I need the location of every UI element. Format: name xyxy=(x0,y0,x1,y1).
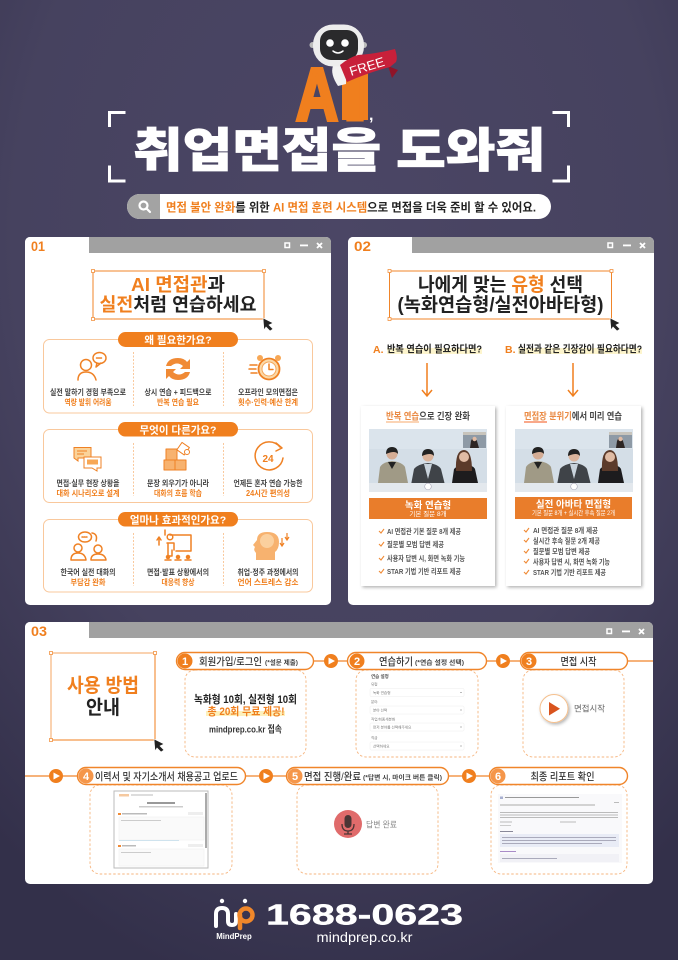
section: why needed: 실전 말하기 경험 부족으로 xyxy=(50,387,127,397)
section: why needed: 반복 연습 필요 xyxy=(157,397,200,407)
option A question xyxy=(373,342,482,356)
step 1: sign up: 총 20회 무료 제공! xyxy=(208,704,284,718)
report screenshot xyxy=(498,794,622,863)
photo: three presenters xyxy=(515,429,633,492)
step 2: practice settings: 연습하기 xyxy=(379,655,413,668)
card A: recording practice: 녹화 연습형 xyxy=(405,500,451,512)
option B question: 실전과 같은 긴장감이 필요하다면? xyxy=(518,342,642,356)
list of features: STAR 기법 기반 리포트 제공 xyxy=(387,567,461,576)
footer: logo xyxy=(216,899,252,941)
step 1: sign up: mindprep.co.kr 접속 xyxy=(209,724,282,736)
upload dialog screenshot xyxy=(114,791,208,868)
card B: real avatar interview: 면접장 분위기에서 미리 연습 xyxy=(524,410,622,422)
step 6: final report xyxy=(490,768,628,874)
step 1: sign up: 회원가입/로그인 xyxy=(199,655,262,668)
settings form screenshot: 분야 선택 xyxy=(373,708,387,712)
list of features: STAR 기법 기반 리포트 제공 xyxy=(533,568,606,577)
section: what is different: 대화 시나리오로 설계 xyxy=(56,488,120,498)
window frame xyxy=(348,237,654,605)
icon: puzzle pieces xyxy=(164,442,190,470)
window frame xyxy=(25,622,653,884)
section: why needed xyxy=(44,332,312,413)
icon: alarm clock xyxy=(249,355,281,380)
card A: recording practice: 반복 연습으로 긴장 완화 xyxy=(386,410,470,422)
arrow: step 4 to 5 xyxy=(259,769,273,783)
title: AI xyxy=(296,53,373,136)
card B: real avatar interview xyxy=(506,406,641,586)
heading box: 안내 xyxy=(86,697,120,719)
step 1: sign up: 녹화형 10회, 실전형 10회 xyxy=(194,692,297,706)
icon: chat bubbles xyxy=(74,448,101,471)
section: what is different: 대화의 흐름 학습 xyxy=(154,488,203,498)
step 6: final report: 6 xyxy=(495,771,501,783)
step 1: sign up: (*설문 제출) xyxy=(265,658,298,666)
section: how effective: 면접·발표 상황에서의 xyxy=(147,567,209,577)
list of features: 질문별 모범 답변 제공 xyxy=(387,540,444,549)
step 2: practice settings: 2 xyxy=(354,656,360,668)
arrow: step 1 to 2 xyxy=(324,654,338,668)
photo: three presenters xyxy=(369,429,487,492)
icon: robot mascot with FREE ribbon xyxy=(310,24,398,86)
icon: robot mascot with FREE ribbon: FREE xyxy=(347,54,387,79)
section: why needed: 왜 필요한가요? xyxy=(144,334,212,346)
step 5: interview in progress: 답변 완료 xyxy=(366,820,397,830)
list of features: 실시간 후속 질문 2개 제공 xyxy=(533,536,600,546)
heading box: AI 면접관과 xyxy=(131,274,225,295)
section: how effective: 대응력 향상 xyxy=(162,577,195,587)
heading box: 사용 방법 xyxy=(67,675,139,697)
window frame: 02 xyxy=(354,239,371,254)
card A: recording practice: 기본 질문 8개 xyxy=(409,509,447,518)
arrow: step 3 to 4 xyxy=(49,769,63,783)
section: what is different xyxy=(44,422,312,502)
title: main heading with corner brackets xyxy=(110,112,568,181)
section: how effective xyxy=(44,512,312,592)
heading box xyxy=(92,270,273,331)
section: why needed: 역량 발휘 어려움 xyxy=(64,397,112,407)
list of features: 질문별 모범 답변 제공 xyxy=(533,547,590,556)
list of features: AI 면접관 기본 질문 8개 제공 xyxy=(387,527,461,536)
option B question xyxy=(505,342,642,356)
section: what is different: 면접·실무 현장 상황을 xyxy=(56,478,120,488)
step 6: final report: 최종 리포트 확인 xyxy=(530,770,594,783)
step 4: upload documents xyxy=(78,768,246,874)
icon: person speaking xyxy=(78,352,106,380)
connector lines xyxy=(25,661,653,776)
section: how effective: 취업·정주 과정에서의 xyxy=(238,567,298,577)
icon: presentation to audience xyxy=(157,530,191,560)
heading box: 나에게 맞는 유형 선택 xyxy=(418,274,583,296)
step 3: start interview xyxy=(520,652,628,757)
settings form screenshot: 녹화 연습형 xyxy=(373,690,391,695)
window frame xyxy=(25,237,331,605)
arrow: step 5 to 6 xyxy=(462,769,476,783)
option A question: A. xyxy=(373,344,384,356)
title: AI: I xyxy=(342,53,368,136)
list of features xyxy=(524,526,610,577)
panel 02: choose type xyxy=(348,237,654,605)
section: what is different: 문장 외우기가 아니라 xyxy=(147,478,210,488)
heading box: (녹화연습형/실전아바타형) xyxy=(398,294,604,316)
section: why needed: 오프라인 모의면접은 xyxy=(238,387,299,397)
settings form screenshot: 직급 xyxy=(371,735,378,740)
window frame: 03 xyxy=(31,624,48,639)
search bar subtitle xyxy=(127,194,551,219)
step 2: practice settings: (*연습 설정 선택) xyxy=(415,658,464,666)
step 3: start interview: 3 xyxy=(526,656,532,668)
step 3: start interview: 면접시작 xyxy=(574,704,605,714)
panel 03: how to use xyxy=(25,622,653,884)
settings form screenshot: 선택하세요 xyxy=(373,744,390,748)
step 5: interview in progress xyxy=(286,768,448,874)
step 4: upload documents: 이력서 및 자기소개서 채용공고 업로드 xyxy=(95,770,238,783)
option A question: 반복 연습이 필요하다면? xyxy=(387,342,482,356)
window frame: 01 xyxy=(31,239,45,254)
icon: two people talking xyxy=(71,532,106,560)
list of features xyxy=(379,527,465,576)
section: how effective: 부담감 완화 xyxy=(70,577,106,587)
search bar subtitle: 면접 불안 완화를 위한 AI 면접 훈련 시스템으로 면접을 더욱 준비 할 수 있어요. xyxy=(166,200,536,214)
arrow B xyxy=(568,363,578,396)
panel 01: AI interviewer xyxy=(25,237,331,605)
arrow: step 2 to 3 xyxy=(496,654,510,668)
section: how effective: 얼마나 효과적인가요? xyxy=(130,514,226,526)
heading box: 실전처럼 연습하세요 xyxy=(100,294,256,315)
card B: real avatar interview: 기본 질문 8개 + 실시간 후속 질문 2개 xyxy=(532,508,615,517)
step 3: start interview: 면접 시작 xyxy=(560,655,597,668)
footer: logo: MindPrep xyxy=(216,932,252,941)
title: main heading with corner brackets: 취업면접을 도와줘 xyxy=(133,124,545,177)
list of features: AI 면접관 질문 8개 제공 xyxy=(533,526,598,535)
step 1: sign up xyxy=(176,652,314,757)
section: what is different: 무엇이 다른가요? xyxy=(140,424,216,436)
section: how effective: 한국어 실전 대화의 xyxy=(60,567,116,577)
icon: head with brain and down arrows xyxy=(253,532,289,560)
step 5: interview in progress: 5 xyxy=(292,771,298,783)
icon: 24 hour clock xyxy=(255,442,283,470)
settings form screenshot: 연습 설정 xyxy=(371,673,389,679)
option B question: B. xyxy=(505,344,516,356)
step 1: sign up: 1 xyxy=(182,656,188,668)
step 2: practice settings xyxy=(348,652,486,757)
settings form screenshot: 직업/최종세분화 xyxy=(371,716,396,722)
settings form screenshot xyxy=(370,673,464,750)
list of features: 사용자 답변 시, 화면 녹화 기능 xyxy=(387,554,465,563)
footer: phone number: 1688-0623 xyxy=(266,900,463,932)
icon: refresh arrows xyxy=(166,358,190,380)
settings form screenshot: 먼저 분야를 선택해주세요 xyxy=(373,724,412,730)
section: what is different: 24시간 편의성 xyxy=(246,488,290,498)
section: what is different: 언제든 혼자 연습 가능한 xyxy=(234,478,303,488)
card B: real avatar interview: 실전 아바타 면접형 xyxy=(536,498,611,510)
heading box xyxy=(388,270,620,331)
step 5: interview in progress: 면접 진행/완료 xyxy=(304,770,361,783)
icon: microphone button xyxy=(334,810,362,838)
title: AI: A xyxy=(296,53,338,136)
section: why needed: 횟수·인력·예산 한계 xyxy=(238,397,298,407)
footer: website: mindprep.co.kr xyxy=(316,929,413,945)
section: how effective: 언어 스트레스 감소 xyxy=(238,577,299,587)
card A: recording practice xyxy=(361,406,495,586)
settings form screenshot: 유형 xyxy=(371,682,378,686)
heading box xyxy=(50,652,164,752)
list of features: 사용자 답변 시, 화면 녹화 기능 xyxy=(533,558,610,566)
arrow A xyxy=(422,363,432,396)
icon: 24 hour clock: 24 xyxy=(262,454,274,465)
step 5: interview in progress: (*답변 시, 마이크 버튼 클릭) xyxy=(363,772,442,782)
section: why needed: 상시 연습 + 피드백으로 xyxy=(144,387,212,397)
settings form screenshot: 분야 xyxy=(371,699,378,704)
step 4: upload documents: 4 xyxy=(83,771,90,783)
icon: magnifier xyxy=(140,202,150,212)
title: AI: , xyxy=(369,107,373,124)
